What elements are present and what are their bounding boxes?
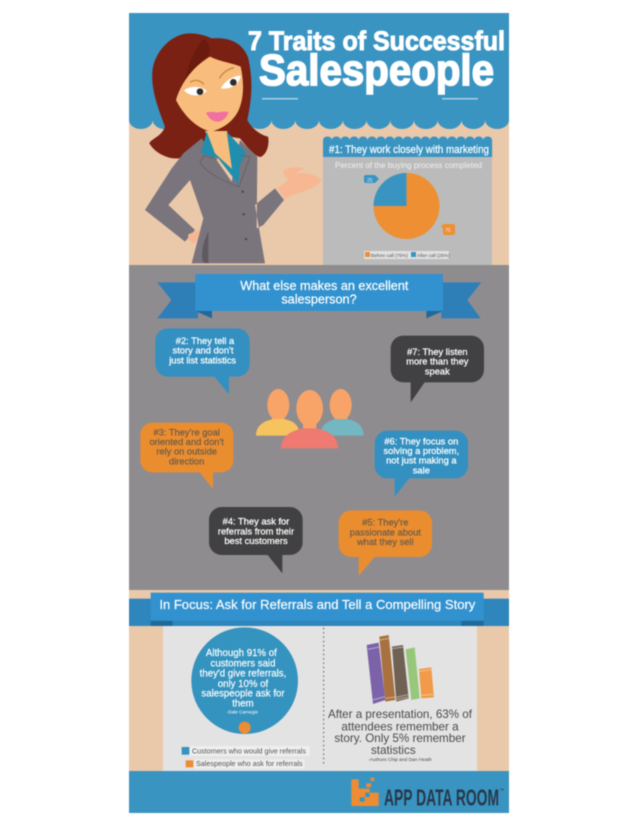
story statistic text: [328, 708, 473, 763]
speech bubble 3: #3: They're goal: [153, 427, 220, 437]
speech bubble 4: referrals from their: [218, 526, 294, 536]
speech bubble 5: #5: They're: [362, 518, 408, 528]
story statistic text: statistics: [371, 744, 416, 757]
speech bubble 2: [155, 328, 250, 394]
speech bubble 6: [375, 431, 468, 497]
lips: [206, 112, 229, 122]
circle statistic: salespeople ask for: [201, 689, 285, 700]
speech bubble 5: [339, 510, 432, 576]
ribbon heading: [157, 274, 481, 318]
content panel: [163, 621, 477, 772]
speech bubble 6: #6: They focus on: [384, 436, 458, 446]
panel: other traits: [129, 265, 509, 590]
speech bubble 3: oriented and don't: [149, 437, 224, 447]
speech bubble 6: sale: [413, 465, 430, 475]
story statistic text: -Authors Chip and Dan Heath: [368, 757, 432, 763]
referrals legend: Customers who would give referrals: [192, 746, 306, 755]
circle statistic: customers said: [211, 658, 275, 669]
panel: trait 1 chart: [323, 136, 492, 265]
speech bubble 7: [391, 336, 484, 402]
speech bubble 3: direction: [169, 456, 204, 466]
heading ribbon: In Focus: Ask for Referrals and Tell a Compelling Story: [159, 597, 476, 612]
story statistic text: After a presentation, 63% of: [328, 708, 473, 721]
referrals legend: Salespeople who ask for referrals: [196, 759, 303, 768]
logo: [351, 778, 504, 810]
circle statistic: [191, 627, 298, 734]
eyes: [184, 87, 207, 95]
speech bubble 2: story and don't: [173, 346, 234, 356]
speech bubble 5: what they sell: [356, 537, 414, 547]
story statistic text: story. Only 5% remember: [334, 732, 466, 745]
panel: in focus: [129, 590, 509, 772]
chart subtitle: Percent of the buying process completed: [335, 160, 482, 170]
story statistic text: attendees remember a: [341, 720, 459, 733]
icon: group of people: [256, 389, 364, 448]
pie chart: [364, 173, 455, 239]
heading ribbon: [129, 593, 509, 626]
heading bar: [323, 136, 492, 157]
speech bubble 6: not just making a: [386, 456, 457, 466]
speech bubble 6: solving a problem,: [383, 446, 459, 456]
footer: [129, 771, 509, 813]
pie chart: 75: [445, 228, 451, 234]
circle statistic: they'd give referrals,: [200, 669, 286, 680]
speech bubble 4: #4: They ask for: [223, 516, 289, 526]
speech bubble 2: just list statistics: [168, 355, 236, 365]
heading text: #1: They work closely with marketing: [329, 144, 489, 156]
speech bubble 3: rely on outside: [156, 447, 217, 457]
logo: ™: [499, 788, 504, 793]
circle statistic: -Dale Carnegie: [227, 710, 258, 715]
speech bubble 7: speak: [425, 366, 450, 376]
title: [248, 26, 505, 95]
blue scalloped banner: [129, 13, 509, 129]
illustration: saleswoman: [145, 33, 322, 263]
title: Salespeople: [259, 46, 494, 95]
speech bubble 4: [209, 507, 303, 573]
pie chart: 25: [367, 178, 373, 184]
circle statistic: Although 91% of: [206, 648, 277, 659]
ribbon heading: salesperson?: [281, 293, 357, 307]
title: 7 Traits of Successful: [248, 26, 505, 56]
icon: books: [367, 635, 434, 704]
chart legend: [364, 251, 450, 259]
speech bubble 7: more than they: [406, 357, 469, 367]
speech bubble 4: best customers: [224, 536, 288, 546]
referrals legend: [182, 746, 310, 769]
panel: header: [129, 13, 509, 265]
ribbon heading: What else makes an excellent: [240, 279, 409, 293]
logo: APP DATA ROOM: [384, 784, 499, 810]
speech bubble 7: #7: They listen: [407, 347, 468, 357]
chart legend: Before call (75%): [371, 253, 408, 259]
chart legend: After call (25%): [417, 253, 450, 259]
speech bubble 2: #2: They tell a: [176, 336, 235, 346]
speech bubble 5: passionate about: [350, 527, 421, 537]
circle statistic: them: [232, 699, 254, 710]
circle statistic: only 10% of: [218, 679, 269, 690]
speech bubble 3: [140, 423, 233, 489]
